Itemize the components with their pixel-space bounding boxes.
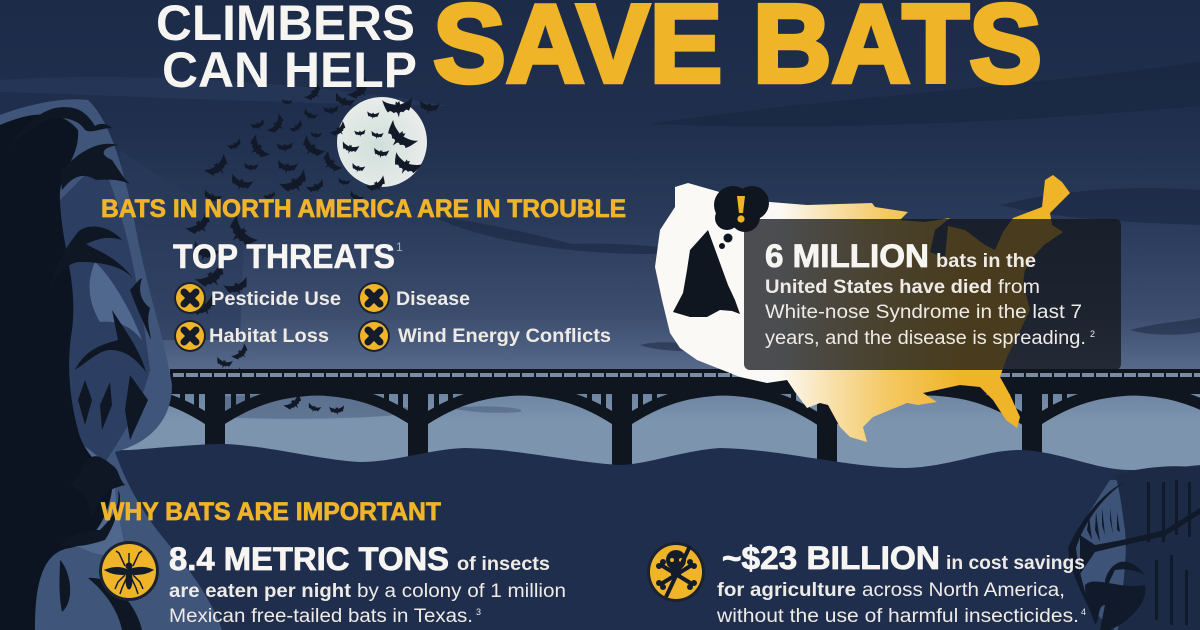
foreground hill <box>0 444 1200 630</box>
threat: wind energy conflicts: Wind Energy Conflicts <box>398 326 611 347</box>
fact: metric tons of insects: by a colony of 1 million <box>357 581 566 602</box>
panel: 6 million callout: from <box>998 277 1040 298</box>
fact: metric tons of insects <box>99 541 566 627</box>
fact: metric tons of insects: Mexican free-tailed bats in Texas. <box>169 606 473 627</box>
clouds in the sky <box>0 62 1200 419</box>
fact: cost savings: across North America, <box>862 580 1065 601</box>
panel: 6 million callout: bats in the <box>936 251 1036 272</box>
distant hill <box>120 150 245 340</box>
threat: habitat loss <box>174 320 329 352</box>
panel: 6 million callout: years, and the disease is spreading. <box>765 328 1086 349</box>
threat: disease <box>358 282 470 314</box>
fact: metric tons of insects: of insects <box>457 554 550 575</box>
heading: why bats are important: WHY BATS ARE IMPORTANT <box>101 498 441 526</box>
threat: habitat loss: Habitat Loss <box>209 326 329 347</box>
bridge <box>1 369 1200 471</box>
icon: no pesticide skull <box>647 542 705 602</box>
fact: cost savings <box>647 540 1086 627</box>
left cliff <box>0 99 222 630</box>
fact: cost savings: ~$23 BILLION <box>722 540 940 576</box>
heading: bats in trouble: BATS IN NORTH AMERICA ARE IN TROUBLE <box>101 195 626 223</box>
threat: wind energy conflicts <box>358 320 611 352</box>
bat flock <box>185 77 440 416</box>
fact: metric tons of insects: 3 <box>476 607 481 617</box>
threat: disease: Disease <box>396 289 470 310</box>
panel: 6 million callout: 6 MILLION <box>765 238 929 274</box>
right cliff <box>1068 466 1200 630</box>
worry thought cloud <box>714 186 769 249</box>
panel: 6 million callout: United States have died <box>765 277 992 298</box>
panel: 6 million callout: 2 <box>1090 329 1095 339</box>
fact: cost savings: 4 <box>1081 607 1086 617</box>
icon: mosquito <box>99 541 159 601</box>
threat: pesticide use <box>174 282 341 314</box>
fact: metric tons of insects: are eaten per night <box>169 581 352 602</box>
fact: cost savings: without the use of harmful insecticides. <box>716 606 1079 627</box>
panel: 6 million callout: White-nose Syndrome in the last 7 <box>765 302 1082 323</box>
fact: cost savings: in cost savings <box>946 553 1085 574</box>
USA map <box>655 175 1070 442</box>
threat: pesticide use: Pesticide Use <box>211 289 341 310</box>
panel: 6 million callout <box>744 219 1121 370</box>
fact: metric tons of insects: 8.4 METRIC TONS <box>169 541 449 577</box>
top threats heading: 1 <box>396 240 403 254</box>
title <box>156 0 1042 106</box>
fact: cost savings: for agriculture <box>717 580 856 601</box>
moon <box>337 97 427 187</box>
bat on map <box>673 230 740 317</box>
title: CAN HELP <box>162 42 417 98</box>
top threats heading: TOP THREATS <box>173 238 395 276</box>
